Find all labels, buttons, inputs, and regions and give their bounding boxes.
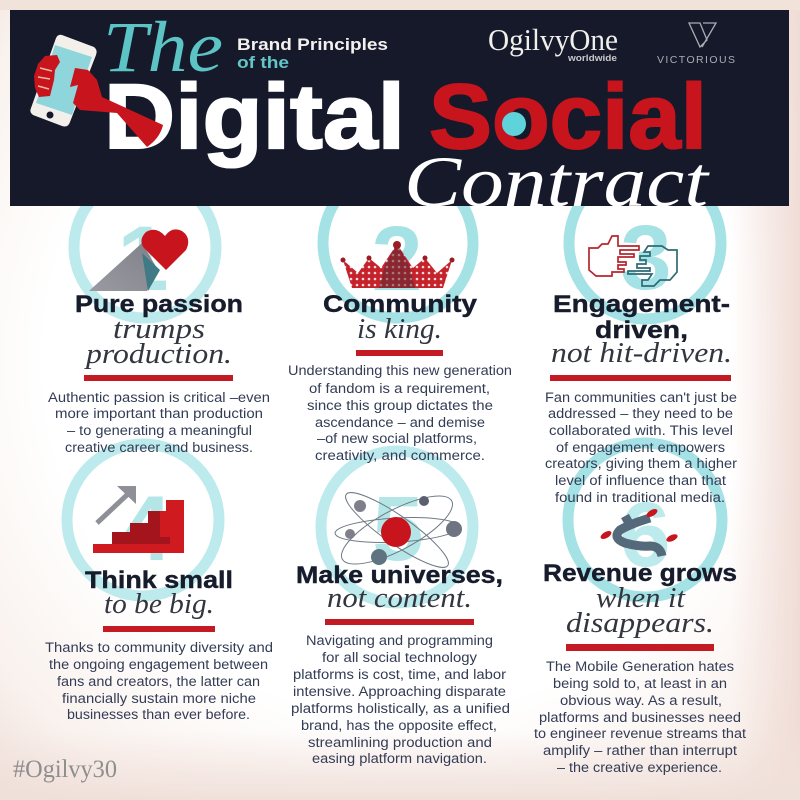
body text: to engineer revenue streams that bbox=[534, 726, 746, 741]
subtitle: Brand Principles of the: of the bbox=[237, 53, 289, 72]
title: Social: Social bbox=[429, 66, 707, 168]
body text: streamlining production and bbox=[308, 735, 492, 750]
heading: Community bbox=[323, 291, 478, 318]
body text: level of influence than that bbox=[555, 473, 726, 488]
body text: for all social technology bbox=[322, 650, 477, 665]
rule bbox=[550, 375, 731, 381]
tagline: production. bbox=[84, 338, 232, 370]
tagline: disappears. bbox=[566, 607, 714, 639]
tagline: trumps bbox=[113, 313, 205, 345]
body text: intensive. Approaching disparate bbox=[293, 684, 506, 699]
panel 5: make universes bbox=[291, 483, 510, 766]
body text: creators, giving them a higher bbox=[545, 456, 738, 471]
body text: Understanding this new generation bbox=[288, 363, 512, 378]
body text: amplify – rather than interrupt bbox=[543, 743, 737, 758]
subtitle: Brand Principles of the: Brand Principles bbox=[237, 35, 388, 54]
body text: collaborated with. This level bbox=[549, 423, 733, 438]
body text: the ongoing engagement between bbox=[49, 657, 268, 672]
icon: stairs and arrow bbox=[93, 486, 184, 553]
body text: creative career and business. bbox=[65, 440, 253, 455]
icon: crown of dots bbox=[340, 241, 454, 288]
body text: The Mobile Generation hates bbox=[546, 659, 734, 674]
body text: –of new social platforms, bbox=[317, 431, 477, 446]
body text: since this group dictates the bbox=[307, 398, 493, 413]
tagline: is king. bbox=[357, 313, 442, 345]
heading: Pure passion bbox=[75, 291, 243, 318]
body text: platforms holistically, as a unified bbox=[291, 701, 510, 716]
panel 3 number ring: 3 bbox=[620, 207, 672, 309]
panel 4: think small bbox=[45, 486, 273, 722]
panel 3: engagement bbox=[545, 236, 738, 505]
heading: Revenue grows bbox=[543, 560, 737, 587]
heading bbox=[553, 291, 730, 344]
rule bbox=[84, 375, 233, 381]
body text bbox=[45, 640, 273, 722]
rule bbox=[566, 644, 714, 651]
body text: addressed – they need to be bbox=[548, 406, 733, 421]
tagline: to be big. bbox=[104, 588, 214, 620]
body text bbox=[545, 390, 738, 505]
body text: platforms is cost, time, and labor bbox=[293, 667, 507, 682]
hashtag: #Ogilvy30 bbox=[13, 756, 117, 783]
body text: found in traditional media. bbox=[555, 490, 725, 505]
panel 5 number ring: 5 bbox=[372, 478, 424, 580]
body text: more important than production bbox=[55, 406, 263, 421]
logo: Victorious: VICTORIOUS bbox=[657, 54, 735, 66]
title: The: The bbox=[103, 7, 223, 87]
heading: Engagement- bbox=[553, 291, 730, 318]
header banner bbox=[10, 10, 789, 206]
rule bbox=[356, 350, 443, 356]
body text: brand, has the opposite effect, bbox=[301, 718, 497, 733]
body text bbox=[291, 633, 510, 766]
icon: vanishing squiggle with leaves bbox=[599, 507, 679, 556]
logo: OgilvyOne worldwide: worldwide bbox=[567, 53, 617, 63]
body text: of fandom is a requirement, bbox=[309, 381, 490, 396]
body text: Thanks to community diversity and bbox=[45, 640, 273, 655]
title: Digital: Digital bbox=[104, 66, 405, 168]
body text: businesses than ever before. bbox=[67, 707, 250, 722]
body text: easing platform navigation. bbox=[312, 751, 487, 766]
body text: Navigating and programming bbox=[306, 633, 493, 648]
body text: Authentic passion is critical –even bbox=[48, 390, 270, 405]
body text: creativity, and commerce. bbox=[315, 448, 485, 463]
heading: Think small bbox=[85, 567, 233, 594]
rule bbox=[325, 619, 474, 625]
panel 4 number ring: 4 bbox=[120, 478, 172, 580]
tagline bbox=[84, 313, 232, 370]
logo: OgilvyOne worldwide: OgilvyOne bbox=[488, 22, 618, 57]
body text: Fan communities can't just be bbox=[545, 390, 737, 405]
icon: hand holding phone bbox=[30, 35, 163, 147]
red hand and forearm bbox=[34, 55, 163, 147]
logo: Victorious bbox=[657, 23, 735, 66]
body text: fans and creators, the latter can bbox=[57, 674, 260, 689]
tagline: not content. bbox=[327, 582, 472, 614]
subtitle: Brand Principles of the bbox=[237, 35, 388, 72]
panel 2 number ring bbox=[323, 168, 473, 318]
body text bbox=[534, 659, 746, 775]
body text: being sold to, at least in an bbox=[553, 676, 727, 691]
body text: – to generating a meaningful bbox=[67, 423, 252, 438]
icon: atom bbox=[333, 483, 462, 577]
body text: financially sustain more niche bbox=[62, 691, 256, 706]
heading: driven, bbox=[595, 317, 688, 344]
panel 6: revenue grows bbox=[534, 507, 746, 775]
tagline: when it bbox=[596, 582, 686, 614]
body text: ascendance – and demise bbox=[315, 415, 485, 430]
body text: obvious way. As a result, bbox=[560, 693, 722, 708]
icon: pixel hands bbox=[589, 236, 677, 286]
panel 4 number ring bbox=[67, 444, 219, 596]
body text: platforms and businesses need bbox=[539, 710, 741, 725]
body text: of engagement empowers bbox=[556, 440, 725, 455]
body text bbox=[48, 390, 270, 455]
panel 1: pure passion bbox=[48, 229, 270, 455]
rule bbox=[103, 626, 215, 632]
body text: – the creative experience. bbox=[557, 760, 722, 775]
panel 2 number ring: 2 bbox=[371, 208, 423, 310]
panel 5 number ring bbox=[321, 451, 473, 603]
tagline bbox=[566, 582, 714, 639]
panel 1 number ring bbox=[74, 176, 216, 318]
panel 6 number ring: 6 bbox=[619, 484, 671, 586]
panel 3 number ring bbox=[569, 167, 721, 319]
icon: heart with grey ramp bbox=[89, 229, 188, 291]
body text bbox=[288, 363, 512, 463]
panel 6 number ring bbox=[568, 443, 722, 597]
panel 2: community bbox=[288, 241, 512, 463]
panel 1 number ring: 1 bbox=[117, 208, 169, 310]
heading: Make universes, bbox=[296, 562, 503, 589]
tagline: not hit-driven. bbox=[551, 337, 732, 369]
title: Contract: Contract bbox=[404, 142, 710, 222]
